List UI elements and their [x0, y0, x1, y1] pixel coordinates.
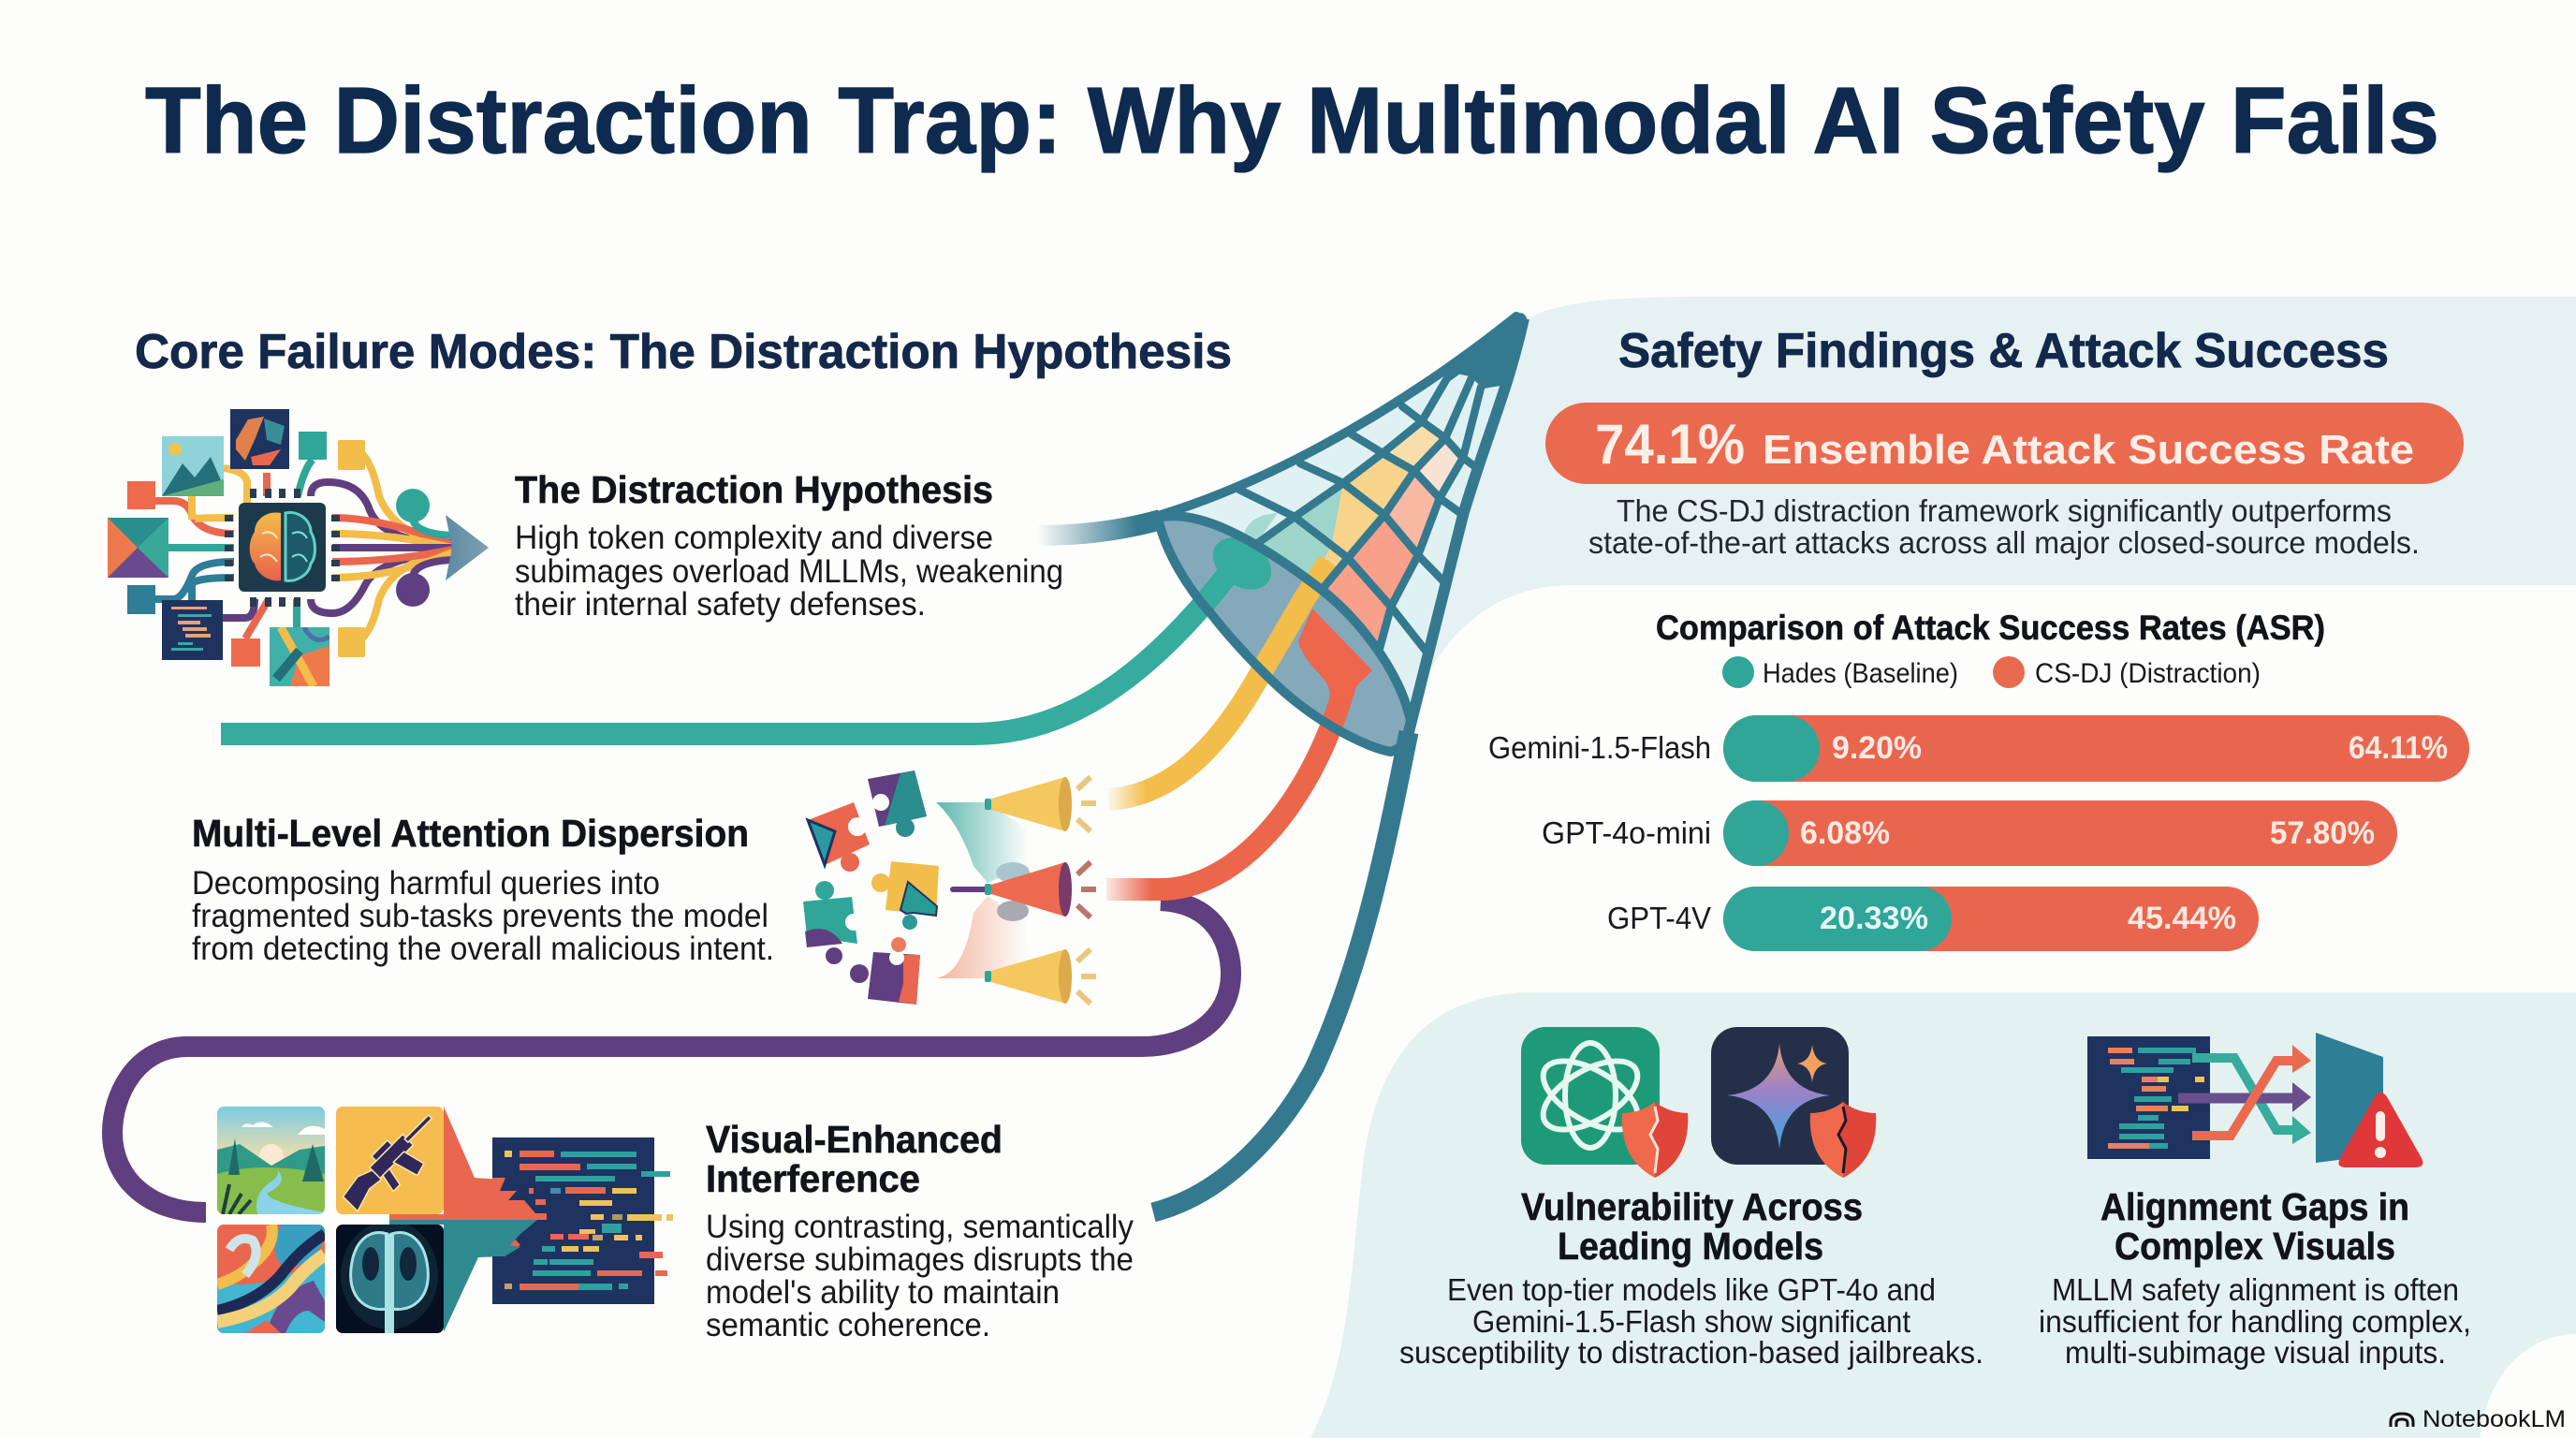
item: alignment gaps [2039, 1033, 2471, 1370]
text: multi-level attention dispersion: from detecting the overall malicious intent. [192, 931, 774, 967]
text: visual-enhanced interference: Visual-Enhanced [706, 1118, 1003, 1161]
icon: chip with brain and data streams [108, 409, 489, 686]
chart legend: Hades (Baseline) [1763, 658, 1958, 689]
text: distraction hypothesis: their internal safety defenses. [515, 586, 926, 623]
text: alignment gaps: multi-subimage visual inputs. [2065, 1335, 2446, 1370]
text: alignment gaps: MLLM safety alignment is often [2052, 1272, 2459, 1307]
text: alignment gaps: Complex Visuals [2115, 1225, 2395, 1268]
text: distraction hypothesis [515, 468, 1063, 623]
bar: Gemini-1.5-Flash: Gemini-1.5-Flash [1488, 730, 1711, 765]
text: visual-enhanced interference: model's ability to maintain [706, 1274, 1060, 1311]
icon: knot tile with cracked shield [1521, 1027, 1688, 1178]
bar: Gemini-1.5-Flash [1488, 715, 2469, 782]
panel: bottom insights background [1310, 992, 2576, 1438]
text: visual-enhanced interference: Interference [706, 1157, 920, 1200]
item: vulnerability across leading models [1399, 1027, 1983, 1370]
bar: GPT-4V: 20.33% [1820, 901, 1928, 936]
heading: core failure modes: Core Failure Modes: The Distraction Hypothesis [135, 325, 1232, 379]
text: visual-enhanced interference: semantic coherence. [706, 1307, 990, 1343]
callout: ensemble attack success rate: Ensemble Attack Success Rate [1763, 427, 2414, 473]
icon: sparkle tile with cracked shield [1711, 1027, 1876, 1178]
bar: GPT-4V: 45.44% [2128, 901, 2236, 936]
text: multi-level attention dispersion: Multi-Level Attention Dispersion [192, 812, 749, 855]
icon: misaligned code to model with warning [2087, 1033, 2422, 1167]
bar: GPT-4o-mini: 57.80% [2270, 815, 2375, 851]
text: vulnerability: Vulnerability Across [1521, 1185, 1863, 1228]
text: multi-level attention dispersion: fragmented sub-tasks prevents the model [192, 898, 768, 934]
heading: safety findings: Safety Findings & Attack Success [1618, 324, 2389, 378]
bar: Gemini-1.5-Flash: 9.20% [1832, 730, 1922, 766]
text: vulnerability: Even top-tier models like GPT-4o and [1447, 1272, 1936, 1307]
title: The Distraction Trap: Why Multimodal AI Safety Fails [145, 68, 2439, 173]
text: multi-level attention dispersion [192, 812, 774, 967]
text: vulnerability: susceptibility to distraction-based jailbreaks. [1399, 1335, 1983, 1370]
bar chart: attack success rates [1488, 609, 2469, 951]
icon: puzzle pieces [803, 770, 939, 1005]
icon: megaphones [936, 777, 1096, 1004]
bar: Gemini-1.5-Flash: 64.11% [2349, 730, 2448, 766]
bar: GPT-4o-mini: GPT-4o-mini [1542, 815, 1711, 850]
text: framework summary: The CS-DJ distraction framework significantly outperforms [1617, 493, 2392, 528]
bar: GPT-4V [1607, 887, 2259, 951]
text: alignment gaps: Alignment Gaps in [2100, 1185, 2409, 1228]
callout: ensemble attack success rate: 74.1% [1595, 413, 1745, 476]
logo: NotebookLM: NotebookLM [2422, 1406, 2566, 1432]
chart legend: CS-DJ (Distraction) [2035, 658, 2261, 689]
text: vulnerability [1399, 1185, 1983, 1370]
panel: safety findings background [1427, 297, 2576, 674]
text: visual-enhanced interference: diverse subimages disrupts the [706, 1241, 1134, 1278]
item: distraction hypothesis [108, 409, 1063, 686]
icon: distraction net [221, 313, 1527, 1212]
text: distraction hypothesis: The Distraction Hypothesis [515, 468, 993, 511]
text: distraction hypothesis: subimages overload MLLMs, weakening [515, 553, 1063, 590]
text: distraction hypothesis: High token complexity and diverse [515, 520, 993, 556]
text: alignment gaps [2039, 1185, 2471, 1370]
bar: GPT-4o-mini: 6.08% [1800, 815, 1890, 851]
callout: ensemble attack success rate [1545, 403, 2464, 484]
text: visual-enhanced interference: Using contrasting, semantically [706, 1209, 1134, 1245]
flow ribbons into the net [112, 520, 1231, 1212]
text: vulnerability: Leading Models [1558, 1225, 1823, 1268]
text: vulnerability: Gemini-1.5-Flash show significant [1472, 1304, 1910, 1339]
bar: GPT-4V: GPT-4V [1607, 901, 1711, 935]
chart legend [1722, 656, 2261, 689]
icon: image grid and code panel [217, 1107, 673, 1333]
text: framework summary [1588, 493, 2420, 560]
text: visual-enhanced interference [706, 1118, 1134, 1343]
item: visual-enhanced interference [217, 1107, 1134, 1343]
item: multi-level attention dispersion [192, 770, 1096, 1005]
bar: GPT-4o-mini [1542, 800, 2397, 866]
text: alignment gaps: insufficient for handling complex, [2039, 1304, 2471, 1339]
chart title: Comparison of Attack Success Rates (ASR) [1656, 609, 2325, 647]
text: framework summary: state-of-the-art attacks across all major closed-source models. [1588, 525, 2420, 560]
text: multi-level attention dispersion: Decomposing harmful queries into [192, 865, 660, 902]
